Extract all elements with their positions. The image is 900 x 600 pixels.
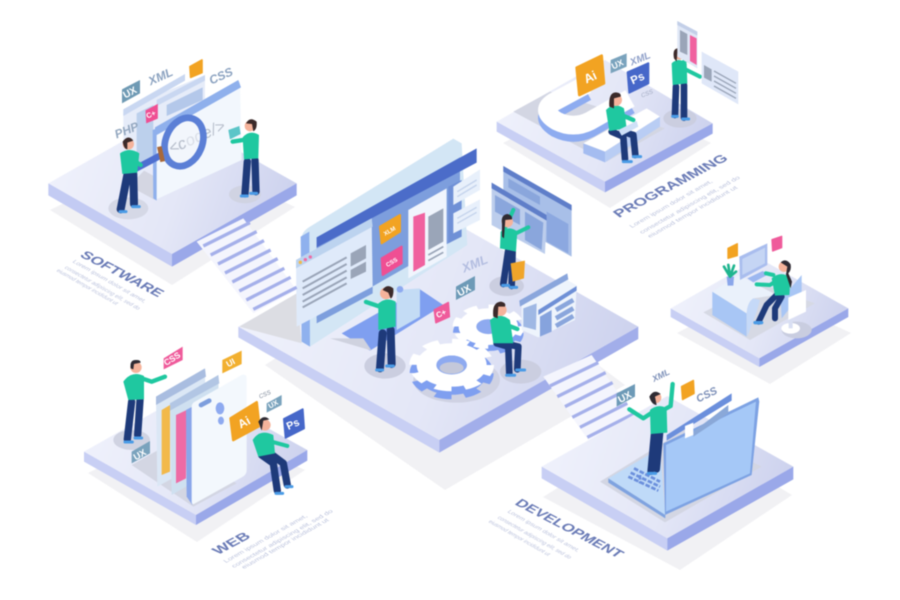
person: seated woman — [583, 92, 660, 162]
panel: central platform — [238, 139, 638, 453]
text: CSS: CSS — [640, 89, 654, 100]
person: standing man — [113, 360, 165, 450]
person: woman with bag — [489, 210, 528, 296]
text: development description: eiusmod tempor incididunt ut — [487, 519, 552, 557]
icon: plant — [724, 265, 736, 286]
panel: software platform — [48, 60, 297, 267]
text: software description: consectetur adipiscing elit, sed do — [63, 265, 142, 311]
desk — [712, 275, 777, 337]
person: woman at desk — [755, 260, 792, 323]
computer — [739, 243, 768, 282]
person: man with magnifier — [108, 138, 148, 219]
person: man on laptop — [629, 384, 673, 473]
badge: UX: UX — [616, 390, 634, 406]
text: programming description: consectetur adipiscing elit, sed do — [638, 175, 742, 235]
person: man with book — [228, 119, 261, 203]
text: web description: Lorem ipsum dolor sit amet, — [222, 514, 310, 564]
window: right with pink bar — [408, 188, 447, 278]
gear: rear — [456, 307, 520, 353]
badge: UX — [610, 53, 627, 73]
text: development description: consectetur adipiscing elit, sed do — [496, 515, 573, 560]
badge: C+ — [434, 303, 449, 323]
panel: desk platform — [671, 236, 848, 367]
badge: UX: UX — [456, 283, 473, 299]
badge: XML — [380, 215, 400, 243]
badge: UI — [222, 351, 242, 373]
floating windows — [492, 166, 572, 257]
text: programming description: Lorem ipsum dolor sit amet, — [628, 179, 715, 229]
back window — [123, 74, 205, 178]
badge: Ps: Ps — [629, 71, 647, 87]
text: development description: Lorem ipsum dolor sit amet, — [506, 509, 581, 553]
text: XML: XML — [628, 50, 652, 69]
stairs: centre to development — [543, 355, 635, 440]
text: CSS: CSS — [694, 385, 719, 405]
badge: orange — [190, 60, 202, 77]
badge: UX: UX — [132, 447, 149, 462]
badge: CSS: CSS — [385, 257, 399, 269]
text: development description — [487, 509, 581, 560]
platform slab — [238, 214, 638, 453]
heading: SOFTWARE: SOFTWARE — [76, 249, 167, 300]
platform slab — [671, 258, 848, 367]
badge: Ai: Ai — [236, 413, 253, 431]
window: left text — [296, 218, 373, 327]
text: software description: Lorem ipsum dolor sit amet, — [71, 259, 148, 304]
badge: orange — [682, 381, 694, 399]
text: CSS: CSS — [258, 390, 272, 400]
text: XML: XML — [459, 252, 490, 276]
text: programming description: eiusmod tempor incididunt ut — [646, 185, 740, 239]
badge: UX — [132, 441, 150, 463]
badge: C+: C+ — [435, 307, 448, 320]
badge: UX: UX — [267, 398, 280, 410]
stairs: software to centre — [197, 218, 297, 313]
badge: C+ — [145, 105, 157, 123]
code window: <code/> — [166, 118, 228, 158]
badge: UX: UX — [610, 57, 625, 71]
badge: Ps: Ps — [285, 416, 302, 433]
floating window with pink bar — [677, 21, 697, 68]
badge: CSS: CSS — [162, 350, 182, 368]
badge: Ps — [284, 409, 304, 438]
text: PHP: PHP — [113, 119, 142, 141]
badge: pink — [772, 236, 782, 251]
text: web description: consectetur adipiscing elit, sed do — [230, 509, 335, 569]
heading: PROGRAMMING: PROGRAMMING — [610, 152, 732, 220]
badge: UI: UI — [224, 356, 237, 369]
panel: programming platform — [497, 21, 738, 192]
badge: Ai: Ai — [582, 68, 599, 86]
platform slab — [84, 388, 307, 525]
platform slab — [48, 113, 297, 267]
text: XML: XML — [650, 367, 671, 384]
badge: orange — [728, 244, 737, 258]
text: XML: XML — [145, 65, 175, 88]
chair — [781, 275, 812, 338]
magnet shape — [547, 84, 630, 132]
badge: UX — [121, 80, 140, 103]
text: software description: eiusmod tempor incididunt ut — [55, 268, 120, 306]
person: standing woman — [663, 48, 700, 128]
laptop — [608, 393, 759, 518]
badge: CSS — [382, 247, 402, 275]
person: man at monitor — [364, 286, 406, 379]
gears — [413, 307, 520, 403]
person: seated man — [253, 417, 292, 493]
panel: web platform — [84, 347, 307, 525]
browser windows — [156, 368, 247, 505]
badge: UX — [456, 276, 475, 300]
heading: DEVELOPMENT: DEVELOPMENT — [511, 497, 627, 561]
badge: Ai — [231, 402, 259, 440]
text: web description: eiusmod tempor incididunt ut — [240, 518, 331, 570]
badge: UX: UX — [121, 85, 139, 101]
heading: WEB: WEB — [209, 530, 254, 557]
magnifier: <c — [166, 135, 189, 158]
text: CSS: CSS — [207, 65, 235, 87]
monitor — [296, 139, 480, 351]
badge: XML: XLM — [383, 226, 397, 238]
platform slab — [497, 60, 713, 192]
floating panel near seated woman — [519, 273, 577, 337]
code window — [153, 80, 242, 201]
gear: front — [414, 341, 490, 397]
badge: Ps — [628, 63, 648, 93]
badge: UX — [616, 384, 635, 407]
panel: development platform — [542, 367, 793, 551]
badge: C+: C+ — [145, 108, 157, 120]
platform slab — [542, 396, 793, 551]
magnifier — [130, 112, 210, 172]
person: seated woman on gear — [490, 302, 541, 384]
floating window with text — [702, 52, 738, 104]
badge: Ai — [577, 56, 604, 95]
floor shadows — [50, 90, 851, 570]
badge: UX — [267, 395, 282, 413]
